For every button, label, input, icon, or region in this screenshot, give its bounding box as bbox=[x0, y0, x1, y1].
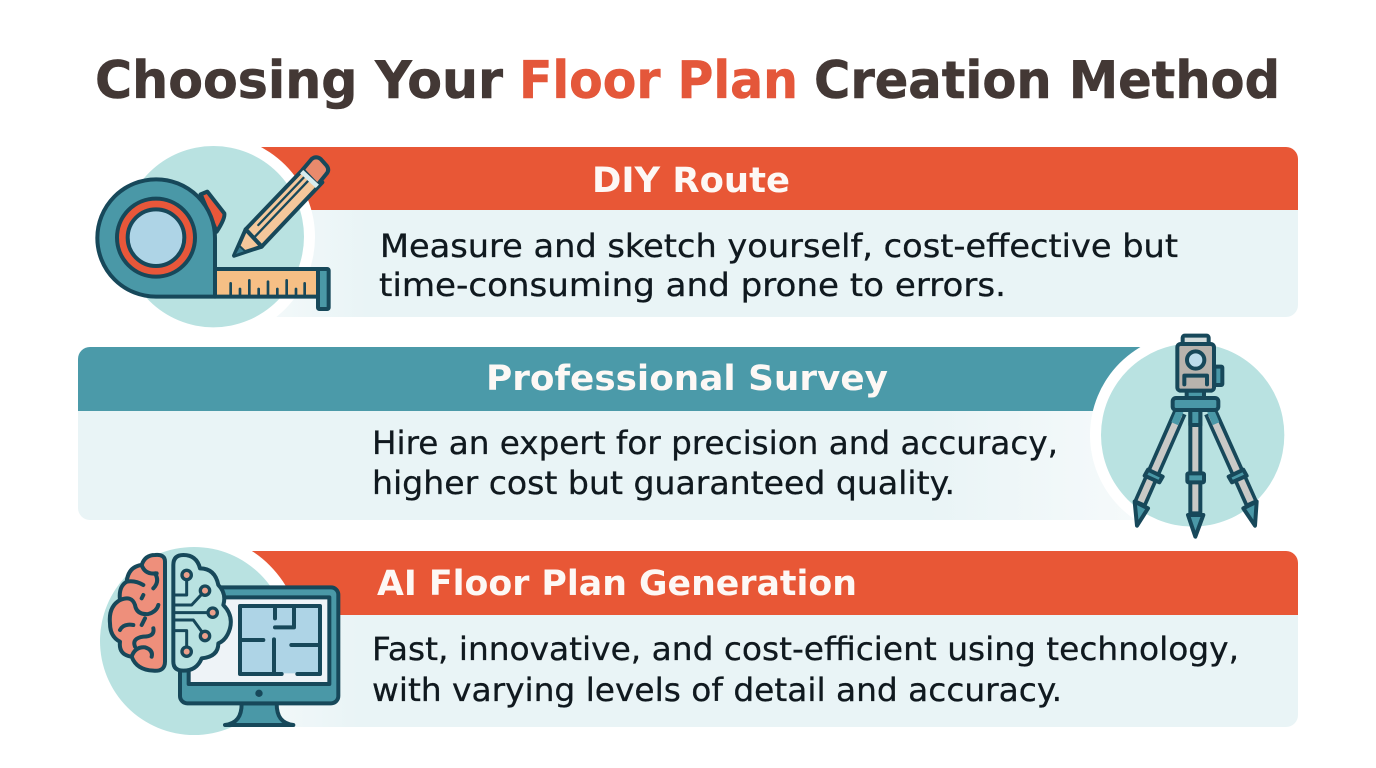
icon: AI brain and monitor with floor plan bbox=[100, 547, 338, 735]
description: with varying levels of detail and accuracy. bbox=[372, 671, 1062, 709]
heading: AI Floor Plan Generation bbox=[377, 564, 857, 604]
title bbox=[95, 51, 1280, 111]
panel body bbox=[230, 595, 1298, 727]
panel header bar bbox=[240, 147, 1298, 210]
panel header bar bbox=[78, 347, 1160, 411]
description: Hire an expert for precision and accuracy, bbox=[372, 424, 1058, 462]
heading: DIY Route bbox=[592, 161, 790, 201]
icon backdrop bbox=[1090, 333, 1294, 537]
panel: DIY Route bbox=[111, 135, 1298, 339]
description bbox=[372, 630, 1239, 709]
description: Fast, innovative, and cost-efficient using technology, bbox=[372, 630, 1239, 668]
panel: AI Floor Plan Generation bbox=[87, 534, 1298, 748]
icon: surveying tripod bbox=[1101, 336, 1284, 537]
icon backdrop bbox=[111, 135, 315, 339]
heading: Professional Survey bbox=[486, 359, 888, 399]
description bbox=[379, 227, 1178, 304]
panel body bbox=[78, 390, 1140, 520]
title: Creation Method bbox=[814, 51, 1280, 111]
description bbox=[372, 424, 1058, 502]
icon: tape measure and pencil bbox=[97, 146, 329, 327]
icon backdrop bbox=[87, 534, 301, 748]
panel header bar bbox=[230, 551, 1298, 615]
panel body bbox=[240, 190, 1298, 317]
description: higher cost but guaranteed quality. bbox=[372, 464, 955, 502]
title: Floor Plan bbox=[519, 51, 798, 111]
title: Choosing Your bbox=[95, 51, 503, 111]
panel: Professional Survey bbox=[78, 333, 1294, 537]
description: time-consuming and prone to errors. bbox=[379, 266, 1006, 304]
description: Measure and sketch yourself, cost-effective but bbox=[380, 227, 1178, 265]
